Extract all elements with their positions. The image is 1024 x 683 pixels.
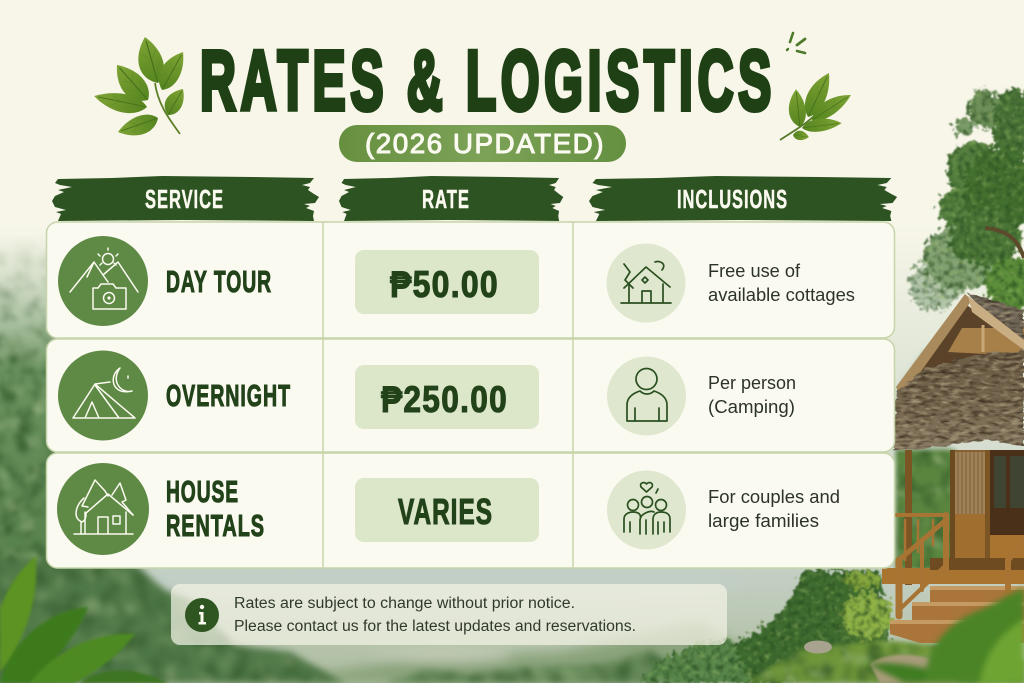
icon: cottage [606, 244, 686, 322]
steps [890, 586, 1024, 643]
hut wall [950, 450, 1024, 575]
hut door [990, 450, 1024, 558]
label [166, 474, 265, 543]
label: RENTALS [166, 508, 265, 543]
inclusion text: For couples and [708, 487, 840, 507]
inclusion text [708, 487, 840, 531]
lower forest slopes [0, 560, 700, 683]
misty distant hills [140, 564, 800, 683]
row: overnight [46, 339, 894, 452]
header: rate [339, 176, 563, 221]
note box [171, 584, 727, 645]
thatch roof [893, 350, 1024, 451]
header: service: SERVICE [145, 184, 224, 214]
note text: Rates are subject to change without prior notice. [234, 595, 575, 612]
inclusion text: available cottages [708, 285, 855, 305]
header: rate: RATE [422, 184, 470, 214]
railing [896, 515, 1024, 616]
header: inclusions: INCLUSIONS [677, 184, 788, 214]
inclusion text [708, 373, 796, 417]
label: DAY TOUR [166, 264, 272, 299]
icon: tent and moon [58, 350, 148, 440]
icon: family [607, 470, 686, 550]
icon: person [607, 356, 686, 436]
note text: Please contact us for the latest updates and reservations. [234, 618, 636, 635]
icon: mountains, sun and camera [58, 236, 148, 326]
header: service [52, 176, 319, 221]
rate: ₱250.00 [381, 379, 508, 420]
right hillside [640, 570, 890, 683]
row: house rentals [46, 453, 894, 568]
subtitle pill: (2026 UPDATED) [365, 128, 605, 159]
mist behind the hut [896, 345, 950, 460]
deck [882, 568, 1024, 584]
accent sparks [787, 33, 805, 53]
hut window view [896, 450, 956, 570]
rate [355, 478, 539, 542]
tree [909, 87, 1024, 313]
inclusion text: Per person [708, 373, 796, 393]
dirt path [870, 655, 960, 683]
foreground leaves: bottom right [868, 588, 1024, 683]
inclusion text [708, 261, 855, 305]
icon: house and trees [57, 463, 149, 555]
rate [355, 365, 539, 429]
rate: VARIES [398, 491, 493, 532]
icon: info [185, 598, 219, 632]
inclusion text: Free use of [708, 261, 801, 281]
foreground leaves: bottom left [0, 556, 168, 683]
rate: ₱50.00 [390, 264, 499, 305]
gable beams [896, 294, 972, 398]
hut gable [905, 305, 1024, 392]
hut [882, 293, 1024, 643]
rate [355, 250, 539, 314]
left leaf sprig [92, 34, 191, 142]
grey ridge thatch [967, 293, 1024, 340]
grass [745, 640, 1024, 683]
label: OVERNIGHT [166, 378, 291, 413]
row: day tour [46, 222, 894, 338]
label: HOUSE [166, 474, 239, 509]
right leaf sprig [780, 69, 855, 141]
table [46, 222, 894, 568]
left forest [0, 235, 70, 683]
hut posts [905, 450, 912, 585]
rock [804, 640, 832, 654]
fern [842, 592, 892, 640]
header: inclusions [589, 176, 897, 221]
inclusion text: (Camping) [708, 397, 795, 417]
note text [234, 595, 636, 635]
inclusion text: large families [708, 511, 819, 531]
